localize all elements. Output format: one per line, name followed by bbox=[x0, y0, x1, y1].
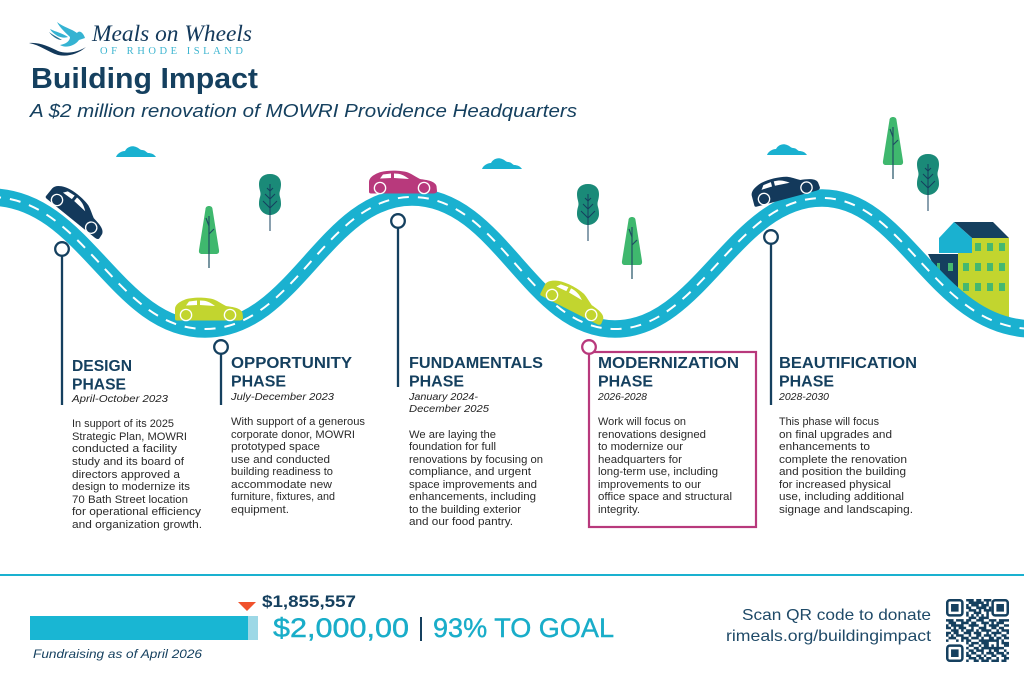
heading: OPPORTUNITY bbox=[231, 355, 352, 372]
QR code bbox=[946, 600, 1009, 661]
date: July-December 2023 bbox=[230, 392, 334, 403]
body text: We are laying the bbox=[409, 429, 496, 441]
car: lime descending bbox=[539, 275, 611, 326]
body text: This phase will focus bbox=[779, 416, 879, 428]
body text: accommodate new bbox=[231, 479, 332, 491]
donate text: rimeals.org/buildingimpact bbox=[726, 628, 932, 645]
goal amount: $2,000,00 bbox=[273, 613, 409, 643]
body text bbox=[779, 416, 913, 516]
heading: PHASE bbox=[409, 374, 464, 390]
heading bbox=[409, 355, 543, 390]
body text: furniture, fixtures, and bbox=[231, 491, 335, 503]
marker bbox=[391, 214, 405, 387]
body text: Work will focus on bbox=[598, 416, 686, 428]
trees bbox=[199, 117, 939, 279]
body text: corporate donor, MOWRI bbox=[231, 429, 355, 441]
heading: PHASE bbox=[779, 374, 834, 390]
icon: building bbox=[928, 222, 1009, 324]
date: 2026-2028 bbox=[597, 392, 647, 403]
heading: MODERNIZATION bbox=[598, 355, 739, 372]
panel: opportunity phase bbox=[214, 340, 365, 516]
body text: signage and landscaping. bbox=[779, 504, 913, 516]
body text: enhancements to bbox=[779, 441, 870, 453]
body text: renovations by focusing on bbox=[409, 454, 543, 466]
body text: use and conducted bbox=[231, 454, 330, 466]
clouds bbox=[116, 144, 807, 169]
body text: enhancements, including bbox=[409, 491, 536, 503]
heading bbox=[72, 358, 132, 394]
body text: directors approved a bbox=[72, 469, 180, 481]
body text: building readiness to bbox=[231, 466, 333, 478]
highlight box bbox=[589, 352, 756, 527]
heading: BEAUTIFICATION bbox=[779, 355, 917, 372]
body text: and position the building bbox=[779, 466, 906, 478]
marker bbox=[214, 340, 228, 405]
marker bbox=[764, 230, 778, 405]
body text bbox=[72, 418, 202, 531]
body text: space improvements and bbox=[409, 479, 537, 491]
body text: use, including additional bbox=[779, 491, 904, 503]
car: lime valley bbox=[175, 298, 243, 321]
body text: to the building exterior bbox=[409, 504, 521, 516]
body text: foundation for full bbox=[409, 441, 496, 453]
logo wordmark: Meals on Wheels bbox=[91, 21, 252, 46]
heading: PHASE bbox=[598, 374, 653, 390]
date bbox=[408, 392, 489, 415]
panel: modernization phase bbox=[582, 340, 756, 527]
car: navy ascending bbox=[749, 168, 821, 208]
body text: improvements to our bbox=[598, 479, 702, 491]
heading: PHASE bbox=[72, 376, 126, 394]
body text: complete the renovation bbox=[779, 454, 907, 466]
body text: With support of a generous bbox=[231, 416, 365, 428]
body text: study and its board of bbox=[72, 456, 184, 468]
panel: design phase bbox=[55, 242, 202, 531]
icon: dove bbox=[29, 22, 86, 56]
heading: FUNDAMENTALS bbox=[409, 355, 543, 372]
body text bbox=[598, 416, 732, 516]
date: April-October 2023 bbox=[71, 394, 168, 405]
title: Building Impact bbox=[31, 63, 258, 95]
panel: beautification phase bbox=[764, 230, 917, 516]
date: January 2024- bbox=[408, 392, 479, 403]
icon: progress marker bbox=[238, 602, 256, 611]
heading bbox=[598, 355, 739, 390]
body text: compliance, and urgent bbox=[409, 466, 531, 478]
body text: and organization growth. bbox=[72, 519, 202, 531]
body text bbox=[409, 429, 543, 528]
marker bbox=[582, 340, 596, 354]
body text: design to modernize its bbox=[72, 481, 190, 493]
heading: PHASE bbox=[231, 374, 286, 390]
body text: Strategic Plan, MOWRI bbox=[72, 431, 187, 443]
date: December 2025 bbox=[409, 404, 489, 415]
body text: equipment. bbox=[231, 504, 289, 516]
body text: on final upgrades and bbox=[779, 429, 892, 441]
body text: for increased physical bbox=[779, 479, 891, 491]
body text: prototyped space bbox=[231, 441, 320, 453]
fundraising progress bar bbox=[30, 616, 258, 640]
heading: DESIGN bbox=[72, 358, 132, 375]
logo subline: OF RHODE ISLAND bbox=[100, 46, 243, 57]
subtitle: A $2 million renovation of MOWRI Providence Headquarters bbox=[29, 101, 577, 121]
body text: In support of its 2025 bbox=[72, 418, 174, 430]
body text: 70 Bath Street location bbox=[72, 494, 188, 506]
body text: long-term use, including bbox=[598, 466, 718, 478]
body text: office space and structural bbox=[598, 491, 732, 503]
body text: conducted a facility bbox=[72, 443, 178, 455]
panel: fundamentals phase bbox=[391, 214, 543, 528]
body text: headquarters for bbox=[598, 454, 682, 466]
amount raised: $1,855,557 bbox=[262, 592, 356, 611]
date: 2028-2030 bbox=[778, 392, 829, 403]
body text: renovations designed bbox=[598, 429, 706, 441]
road bbox=[0, 197, 1024, 329]
car: magenta peak bbox=[369, 171, 437, 194]
body text: for operational efficiency bbox=[72, 506, 202, 518]
body text: integrity. bbox=[598, 504, 640, 516]
body text: to modernize our bbox=[598, 441, 683, 453]
fundraising caption: Fundraising as of April 2026 bbox=[33, 649, 203, 661]
marker bbox=[55, 242, 69, 405]
body text bbox=[231, 416, 365, 516]
donate text: Scan QR code to donate bbox=[742, 607, 931, 624]
donate text bbox=[726, 607, 932, 645]
logo bbox=[29, 21, 252, 57]
body text: and our food pantry. bbox=[409, 516, 513, 528]
heading bbox=[779, 355, 917, 390]
percent to goal: 93% TO GOAL bbox=[433, 613, 614, 643]
car: navy descending bbox=[44, 180, 112, 241]
heading bbox=[231, 355, 352, 390]
